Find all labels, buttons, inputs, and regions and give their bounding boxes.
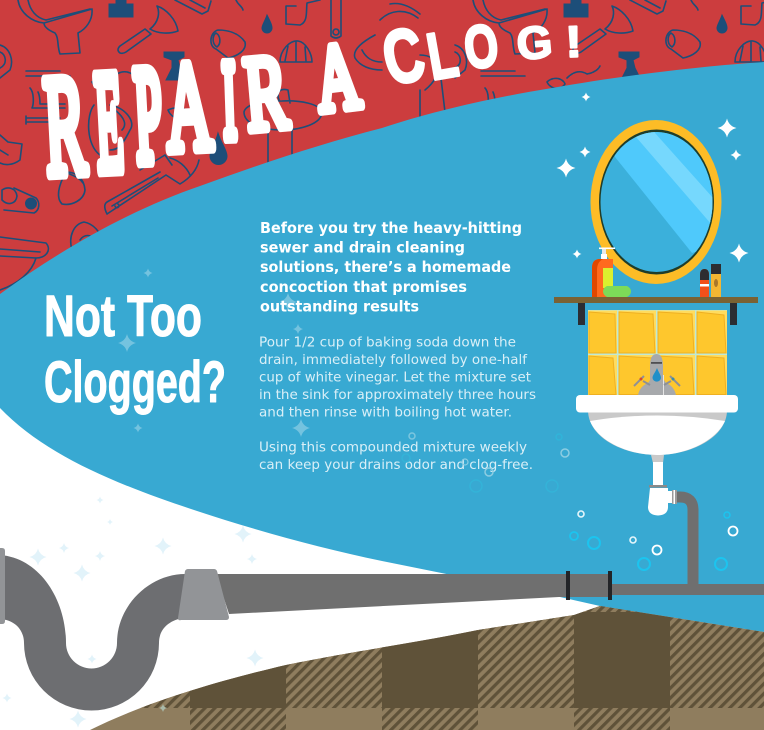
text block: intro: sewer and drain cleaning	[260, 239, 465, 257]
doodle pattern: repeated tile	[455, 0, 764, 290]
text block: intro: Before you try the heavy-hitting	[260, 219, 522, 237]
heading: CLOG!: !	[565, 17, 582, 67]
text block: instructions: can keep your drains odor and clog-free.	[259, 457, 533, 473]
soil: checker ground	[90, 600, 764, 730]
text block: intro: outstanding results	[260, 297, 419, 315]
text block: instructions: Pour 1/2 cup of baking soda down the	[259, 334, 516, 350]
heading: REPAIR A: P	[131, 40, 166, 192]
icon: soap dispenser	[592, 248, 615, 297]
heading: REPAIR A	[40, 23, 365, 205]
main drain pipe	[216, 571, 764, 614]
text block: instructions: Using this compounded mixture weekly	[259, 440, 527, 456]
text block: instructions: drain, immediately followed by one-half	[259, 352, 528, 368]
heading: CLOG!: G	[514, 15, 555, 70]
heading: Not Too Clogged?: Clogged?	[44, 350, 226, 415]
heading: Not Too Clogged?: Not Too	[44, 284, 202, 349]
heading: CLOG!	[375, 11, 582, 103]
sparkles: white area	[2, 496, 263, 728]
heading: Not Too Clogged?	[44, 284, 226, 415]
heading: REPAIR A: E	[91, 42, 126, 201]
bubbles: bright	[570, 511, 738, 570]
text block: intro: solutions, there’s a homemade	[260, 258, 511, 276]
panel: blue swoosh	[0, 62, 764, 632]
heading: REPAIR A: R	[240, 32, 293, 153]
sparkle on soil	[159, 704, 167, 712]
faint sparkles on blue	[118, 268, 310, 437]
heading: REPAIR A: A	[310, 23, 365, 131]
icon: sink trap and drain pipe	[648, 488, 693, 590]
icon: sink	[576, 395, 738, 488]
bubbles: faint behind text	[402, 433, 569, 492]
doodle pattern: plumbing tools	[0, 0, 445, 290]
icon: small bottles	[700, 264, 721, 297]
panel: red plumbing doodle header	[0, 0, 764, 300]
heading: REPAIR A: A	[162, 35, 215, 178]
heading: CLOG!: L	[422, 17, 463, 95]
text block: instructions	[259, 334, 536, 473]
icon: soap bar	[603, 286, 631, 297]
heading: CLOG!: O	[461, 13, 502, 83]
panel: white drain area background	[0, 400, 764, 730]
S-trap pipe	[0, 548, 229, 710]
tile wall	[588, 310, 727, 395]
text block: intro: concoction that promises	[260, 278, 467, 296]
shelf	[554, 297, 758, 325]
text block: instructions: and then rinse with boiling hot water.	[259, 404, 512, 420]
icon: faucet	[634, 354, 680, 395]
text block: instructions: cup of white vinegar. Let the mixture set	[259, 370, 531, 386]
heading: CLOG!: C	[375, 11, 432, 103]
text block: intro	[260, 219, 522, 315]
icon: mirror	[590, 120, 722, 284]
heading: REPAIR A: I	[221, 38, 238, 161]
sparkles: around mirror	[556, 92, 748, 262]
heading: REPAIR A: R	[40, 46, 89, 205]
text block: instructions: in the sink for approximately three hours	[259, 387, 536, 403]
